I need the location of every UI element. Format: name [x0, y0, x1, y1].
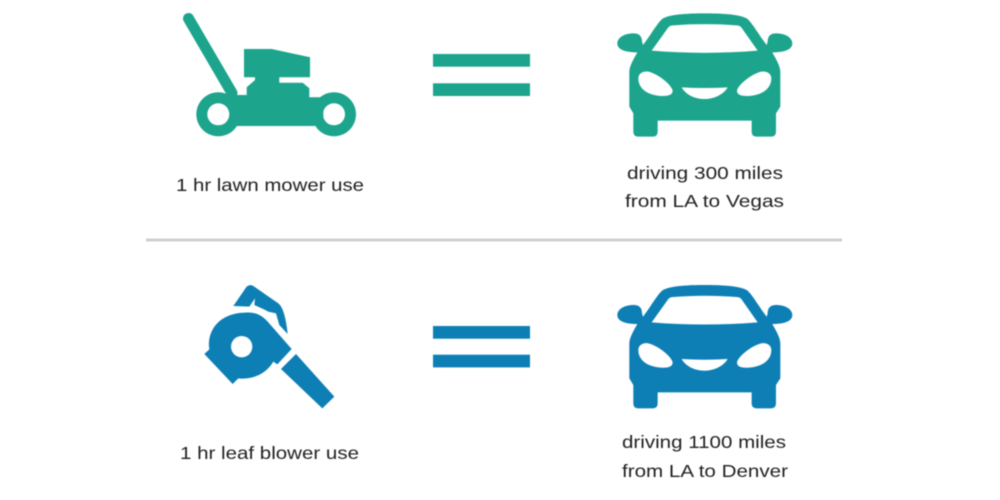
label: LA to Denver: driving 1100 miles — [622, 432, 786, 452]
label: LA to Vegas: driving 300 miles — [627, 163, 783, 183]
icon: teal equals sign — [433, 54, 530, 96]
label: LA to Denver — [622, 432, 788, 481]
row: leaf blower comparison — [180, 285, 792, 481]
label: leaf blower: 1 hr leaf blower use — [180, 443, 359, 463]
label: LA to Vegas: from LA to Vegas — [625, 191, 784, 211]
icon: blue equals sign — [433, 326, 530, 367]
icon: blue car — [617, 285, 792, 408]
label: LA to Denver: from LA to Denver — [622, 461, 788, 481]
icon: lawn mower — [188, 18, 356, 136]
label: LA to Vegas — [625, 163, 784, 211]
row: lawn mower comparison — [176, 13, 792, 211]
icon: leaf blower — [204, 285, 334, 408]
icon: teal car — [617, 13, 792, 137]
label: lawn mower: 1 hr lawn mower use — [176, 175, 364, 195]
